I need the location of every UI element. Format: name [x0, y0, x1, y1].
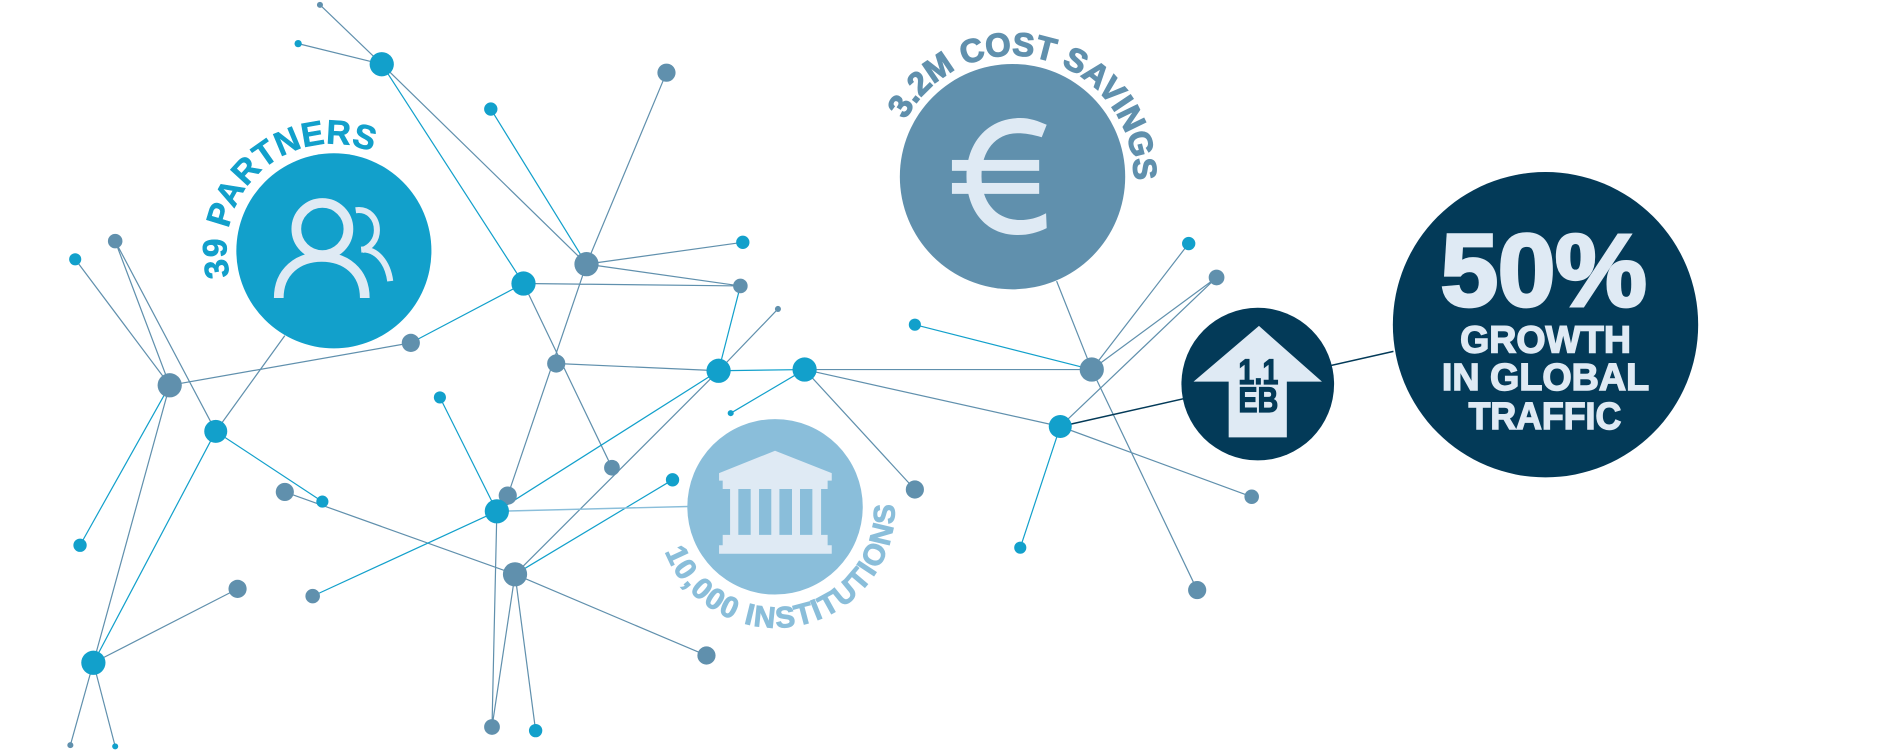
label: 1.1 EB [1238, 353, 1278, 420]
label: 1.1 EB: EB [1238, 381, 1278, 420]
icon: euro [952, 118, 1047, 235]
icon: up arrow [1194, 326, 1322, 437]
label: 50% growth in global traffic: IN GLOBAL [1442, 356, 1649, 398]
label: 1.1 EB: 1.1 [1238, 353, 1278, 392]
label: 50% growth in global traffic: GROWTH [1460, 319, 1631, 361]
panel: 1.1 EB arrow [1181, 308, 1334, 460]
label: 50% growth in global traffic: 50% [1441, 213, 1647, 327]
panel: 50% growth [1393, 172, 1698, 477]
label: 50% growth in global traffic: TRAFFIC [1469, 395, 1621, 437]
panel: 39 partners [202, 120, 432, 348]
label: 10,000 institutions: 10,000 INSTITUTIONS [665, 505, 896, 628]
panel: cost savings [888, 32, 1157, 290]
panel: institutions [665, 419, 896, 628]
label: 39 partners: 39 PARTNERS [202, 120, 376, 278]
network nodes [67, 2, 1259, 749]
network connection lines [70, 5, 1393, 746]
icon: people [279, 203, 390, 298]
icon: bank building [719, 451, 832, 554]
label: 50% growth in global traffic [1441, 213, 1649, 437]
label: 3.2M cost savings: 3.2M COST SAVINGS [888, 32, 1157, 180]
